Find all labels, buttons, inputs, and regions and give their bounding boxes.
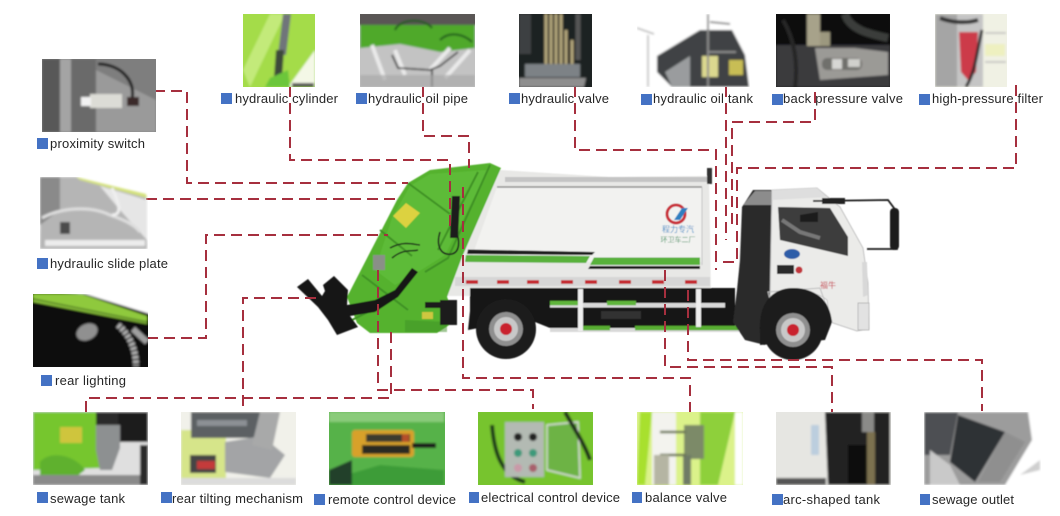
- hydraulic cylinder: [450, 196, 460, 238]
- panel: rear lighting: [31, 292, 150, 388]
- photo: arc-shaped tank: [776, 412, 891, 485]
- photo: hydraulic cylinder: [243, 14, 315, 87]
- label: hydraulic oil tank: [653, 91, 754, 106]
- photo: hydraulic slide plate: [40, 177, 148, 249]
- control box: [373, 255, 385, 270]
- white cab: [770, 188, 869, 331]
- panel: hydraulic oil tank: [635, 12, 754, 106]
- panel: hydraulic oil pipe: [356, 12, 477, 106]
- label: rear tilting mechanism: [172, 491, 303, 506]
- manufacturer logo: [660, 205, 696, 244]
- label: sewage tank: [50, 491, 126, 506]
- photo: rear tilting mechanism: [181, 412, 296, 485]
- rear tilting arm: [297, 268, 418, 335]
- panel: sewage outlet: [920, 410, 1043, 507]
- side mirror: [813, 198, 899, 250]
- rear wheel: [468, 292, 546, 359]
- panel: hydraulic valve: [509, 12, 609, 106]
- label: hydraulic cylinder: [235, 91, 339, 106]
- marker: [161, 492, 172, 503]
- warning sticker: [393, 203, 420, 228]
- label: arc-shaped tank: [783, 492, 880, 507]
- photo: electrical control device: [478, 412, 593, 485]
- marker: [509, 93, 520, 104]
- photo: sewage tank: [33, 412, 148, 485]
- marker: [919, 94, 930, 105]
- marker: [314, 494, 325, 505]
- dashed leader lines: [86, 85, 1016, 413]
- photo: sewage outlet: [924, 412, 1041, 485]
- photo: hydraulic valve: [519, 14, 592, 87]
- marker: [469, 492, 479, 503]
- photo: hydraulic oil tank: [637, 14, 750, 87]
- label: hydraulic slide plate: [50, 256, 168, 271]
- manufacturer logo: 程力专汽: [662, 224, 694, 234]
- panel: proximity switch: [37, 57, 158, 151]
- photo: back pressure valve: [776, 14, 890, 87]
- marker: [37, 492, 48, 503]
- marker: [772, 94, 783, 105]
- reflective strip: [455, 277, 710, 286]
- label: electrical control device: [481, 490, 620, 505]
- photo: proximity switch: [42, 59, 156, 132]
- compactor green tailgate: [347, 163, 501, 333]
- panel: electrical control device: [469, 410, 620, 505]
- panel: back pressure valve: [772, 12, 903, 106]
- panel: rear tilting mechanism: [161, 410, 303, 506]
- front wheel: [760, 288, 832, 360]
- truck illustration: [297, 163, 899, 360]
- marker: [37, 258, 48, 269]
- manufacturer logo: 环卫车二厂: [660, 235, 696, 244]
- cab back and engine: [733, 190, 775, 345]
- label: balance valve: [645, 490, 727, 505]
- label: proximity switch: [50, 136, 145, 151]
- photo: remote control device: [329, 412, 445, 485]
- marker: [641, 94, 652, 105]
- marker: [356, 93, 367, 104]
- marker: [221, 93, 232, 104]
- photo: balance valve: [637, 412, 743, 485]
- marker: [41, 375, 52, 386]
- door badges: [777, 249, 836, 290]
- label: high-pressure filter: [932, 91, 1044, 106]
- chassis: [470, 288, 735, 332]
- panel: sewage tank: [31, 410, 150, 506]
- label: hydraulic oil pipe: [368, 91, 468, 106]
- label: remote control device: [328, 492, 456, 507]
- white compactor body: [447, 170, 711, 296]
- panel: balance valve: [632, 410, 745, 505]
- photo: rear lighting: [33, 294, 148, 367]
- label: hydraulic valve: [521, 91, 609, 106]
- marker: [632, 492, 642, 503]
- body side stripes: [467, 250, 595, 255]
- photo: high-pressure filter: [935, 14, 1007, 87]
- label: sewage outlet: [932, 492, 1014, 507]
- panel: hydraulic cylinder: [221, 12, 339, 106]
- panel: high-pressure filter: [919, 12, 1044, 106]
- front bumper: [858, 303, 869, 330]
- marker: [920, 494, 930, 505]
- cab window: [778, 207, 848, 256]
- marker: [772, 494, 783, 505]
- panel: remote control device: [314, 410, 456, 507]
- panel: hydraulic slide plate: [37, 177, 168, 271]
- panel: arc-shaped tank: [772, 410, 893, 507]
- marker: [37, 138, 48, 149]
- door badges: 福牛: [820, 280, 836, 290]
- label: back pressure valve: [783, 91, 903, 106]
- photo: hydraulic oil pipe: [360, 14, 475, 87]
- label: rear lighting: [55, 373, 126, 388]
